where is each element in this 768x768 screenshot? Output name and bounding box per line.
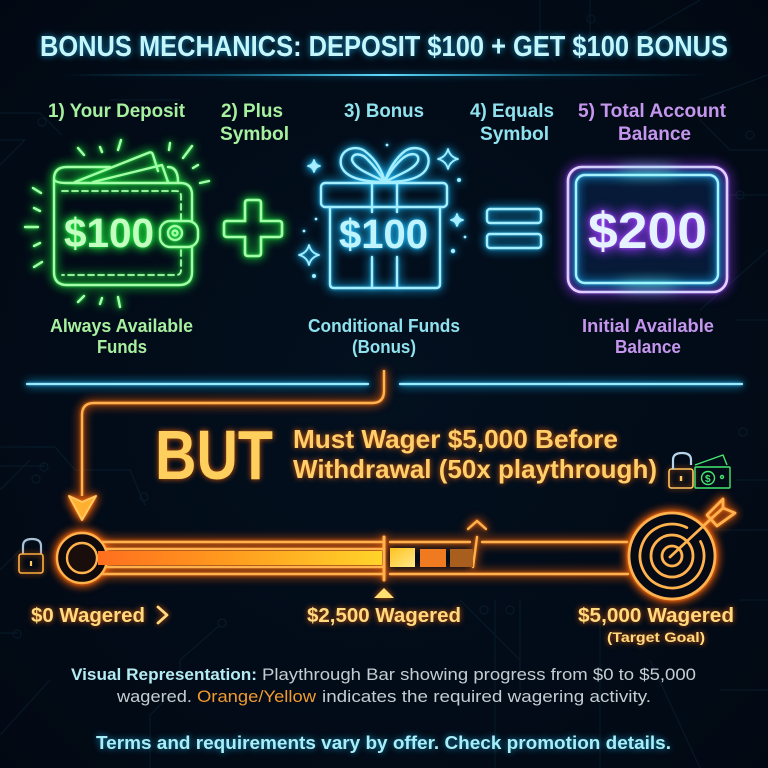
caption: conditional funds: (Bonus) xyxy=(352,337,416,357)
midpoint triangle xyxy=(374,588,394,598)
icon: open lock and cash: $ xyxy=(705,474,711,485)
step 4 heading: 4) Equals xyxy=(470,101,554,122)
icon: open lock and cash xyxy=(669,453,730,488)
label: $5,000 wagered target goal: $5,000 Wagered xyxy=(578,605,734,627)
caption: always available funds xyxy=(50,316,193,357)
start ring xyxy=(57,533,107,583)
chart: playthrough progress bar xyxy=(57,499,735,599)
icon: closed lock xyxy=(19,539,43,573)
text block: visual representation note: indicates the required wagering activity. xyxy=(322,687,651,706)
step 5 heading xyxy=(578,101,727,145)
bar fill to $2,500 xyxy=(98,551,382,565)
text block: visual representation note xyxy=(71,665,696,706)
$200 amount: $200 xyxy=(588,202,707,259)
label: $2,500 wagered: $2,500 Wagered xyxy=(307,605,461,627)
caption: conditional funds: Conditional Funds xyxy=(308,316,460,336)
text block: visual representation note: Orange/Yellow xyxy=(197,687,317,706)
step 5 heading: 5) Total Account xyxy=(578,101,727,122)
caption: conditional funds xyxy=(308,316,460,357)
callout: wagering requirement xyxy=(293,424,657,484)
caption: initial available balance: Balance xyxy=(615,337,681,357)
icon: plus symbol xyxy=(224,200,282,256)
panel: $200 total balance xyxy=(568,167,727,292)
divider xyxy=(27,383,742,385)
step 2 heading xyxy=(220,101,289,145)
caption: initial available balance: Initial Available xyxy=(582,316,714,336)
step 4 heading: Symbol xyxy=(480,124,549,145)
step 4 heading xyxy=(470,101,554,145)
callout: BUT: BUT xyxy=(155,416,273,494)
icon: equals symbol xyxy=(487,209,541,248)
label: $0 wagered: $0 Wagered xyxy=(31,605,145,627)
step 3 heading: 3) Bonus xyxy=(344,101,424,122)
step 1 heading: 1) Your Deposit xyxy=(48,101,186,122)
progress marker xyxy=(468,521,486,567)
arrow: bonus to playthrough bar xyxy=(69,370,384,520)
text block: visual representation note: Visual Representation: xyxy=(71,665,257,684)
step 2 heading: 2) Plus xyxy=(221,101,283,122)
icon: wallet with $100 xyxy=(25,140,209,307)
caption: initial available balance xyxy=(582,316,714,357)
icon: target with arrow xyxy=(629,499,735,599)
progress segments past $2,500 xyxy=(390,548,473,567)
step 5 heading: Balance xyxy=(618,124,691,145)
text block: visual representation note: Playthrough Bar showing progress from $0 to $5,000 xyxy=(262,665,696,684)
callout: wagering requirement: Withdrawal (50x playthrough) xyxy=(293,454,657,484)
$100 amount in gift: $100 xyxy=(339,211,428,257)
caption: always available funds: Always Available xyxy=(50,316,193,336)
caption: always available funds: Funds xyxy=(97,337,147,357)
$100 amount in wallet: $100 xyxy=(64,210,154,256)
step 2 heading: Symbol xyxy=(220,124,289,145)
label: $5,000 wagered target goal: (Target Goal) xyxy=(607,629,705,645)
midpoint tick xyxy=(382,537,386,580)
text block: visual representation note: wagered. xyxy=(116,687,192,706)
label: $5,000 wagered target goal xyxy=(578,605,734,645)
icon: gift box with $100 xyxy=(299,144,466,288)
sparkles around gift xyxy=(299,144,466,278)
footer note: Terms and requirements vary by offer. Check promotion details. xyxy=(96,733,671,753)
callout: wagering requirement: Must Wager $5,000 Before xyxy=(293,424,618,454)
